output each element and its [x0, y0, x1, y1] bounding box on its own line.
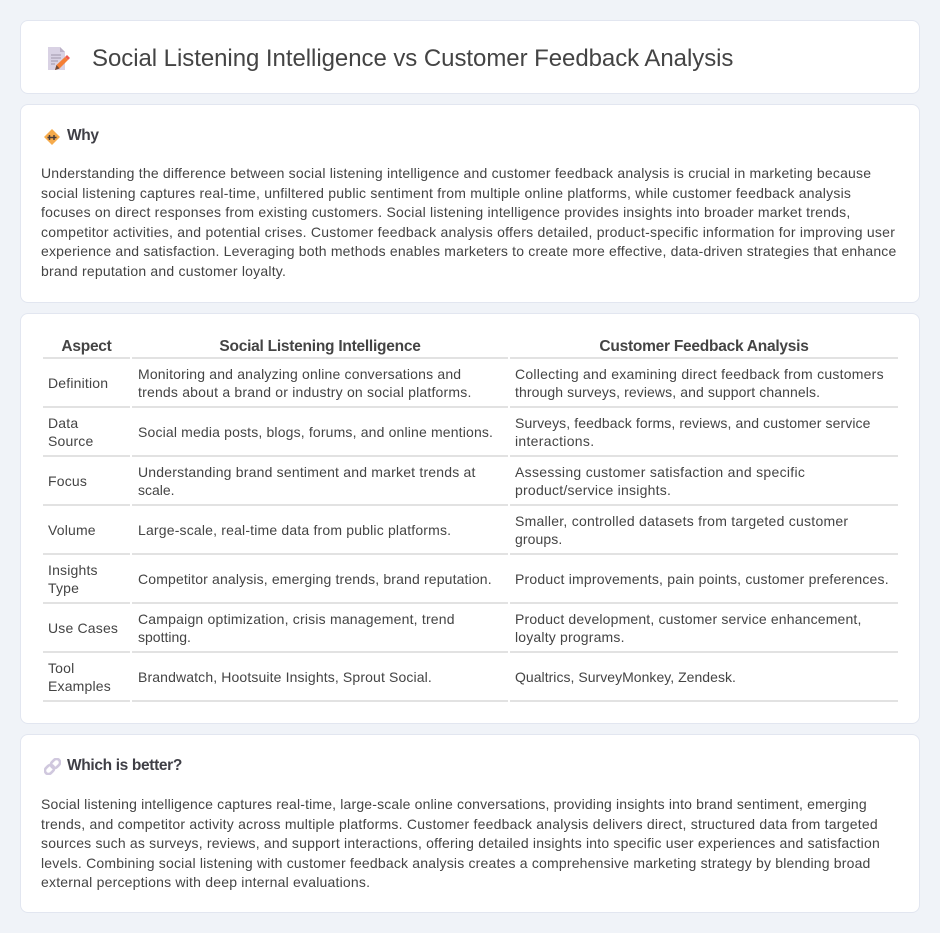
row: tool examples: Qualtrics, SurveyMonkey, Zendesk. [515, 669, 736, 685]
row: insights type: Competitor analysis, emerging trends, brand reputation. [138, 571, 492, 587]
table header row: Customer Feedback Analysis [599, 338, 809, 355]
icon: chain link [44, 758, 61, 775]
row: insights type: Insights [48, 562, 98, 578]
row: data source: Source [48, 433, 93, 449]
row: data source: Social media posts, blogs, forums, and online mentions. [138, 424, 493, 440]
row: use cases: Product development, customer service enhancement, [515, 611, 862, 627]
text: which is better paragraph [41, 796, 880, 890]
table header row: Social Listening Intelligence [219, 338, 421, 355]
row: data source: interactions. [515, 433, 594, 449]
row: use cases [43, 611, 898, 653]
title: Social Listening Intelligence vs Customer Feedback Analysis [92, 45, 733, 72]
text: which is better paragraph: sources such as surveys, reviews, and support interactions, offering detailed insights into specific user experiences and satisfaction [41, 835, 880, 851]
row: definition [43, 366, 898, 408]
text: why paragraph: brand reputation and customer loyalty. [41, 263, 286, 279]
text: why paragraph: competitor activities, and potential crises. Customer feedback analysis offers detailed, product-specific information for improving user [41, 224, 895, 240]
row: definition: Collecting and examining direct feedback from customers [515, 366, 884, 382]
row: insights type: Type [48, 580, 79, 596]
row: volume: Volume [48, 522, 96, 538]
text: which is better paragraph: Social listening intelligence captures real-time, large-scale online conversations, providing insights into brand sentiment, emerging [41, 796, 867, 812]
row: focus: scale. [138, 482, 175, 498]
row: focus [43, 464, 898, 506]
row: use cases: Use Cases [48, 620, 118, 636]
row: data source [43, 415, 898, 457]
row: focus: Focus [48, 473, 87, 489]
row: definition: trends about a brand or industry on social platforms. [138, 384, 472, 400]
table header row [43, 338, 898, 359]
row: focus: Assessing customer satisfaction and specific [515, 464, 805, 480]
row: definition: Definition [48, 375, 108, 391]
row: data source: Data [48, 415, 78, 431]
row: insights type [43, 562, 898, 604]
panel: which is better [20, 734, 920, 913]
row: volume: Smaller, controlled datasets from targeted customer [515, 513, 848, 529]
icon: document with pencil [48, 47, 70, 70]
heading: which is better: Which is better? [67, 757, 182, 774]
row: use cases: Campaign optimization, crisis management, trend [138, 611, 455, 627]
heading: why: Why [67, 127, 99, 144]
text: why paragraph: experience and satisfaction. Leveraging both methods enables marketers to create more effective, data-driven strategies that enhance [41, 243, 896, 259]
panel: why [20, 104, 920, 303]
row: tool examples [43, 660, 898, 702]
table header row: Aspect [61, 338, 112, 355]
row: volume [43, 513, 898, 555]
text: why paragraph: social listening captures real-time, unfiltered public sentiment from multiple online platforms, while customer feedback analysis [41, 185, 851, 201]
row: use cases: loyalty programs. [515, 629, 625, 645]
icon: diamond sign [44, 129, 60, 145]
text: why paragraph: Understanding the difference between social listening intelligence and customer feedback analysis is crucial in marketing because [41, 165, 871, 181]
header panel [20, 20, 920, 94]
row: tool examples: Brandwatch, Hootsuite Insights, Sprout Social. [138, 669, 432, 685]
row: use cases: spotting. [138, 629, 191, 645]
panel: comparison table [20, 313, 920, 724]
comparison table [43, 338, 898, 702]
row: focus: product/service insights. [515, 482, 671, 498]
row: tool examples: Tool [48, 660, 74, 676]
text: which is better paragraph: external perceptions with deep internal evaluations. [41, 874, 370, 890]
row: tool examples: Examples [48, 678, 111, 694]
row: volume: groups. [515, 531, 562, 547]
row: insights type: Product improvements, pain points, customer preferences. [515, 571, 889, 587]
row: focus: Understanding brand sentiment and market trends at [138, 464, 476, 480]
text: why paragraph: focuses on direct responses from existing customers. Social listening intelligence provides insights into broader market trends, [41, 204, 850, 220]
row: volume: Large-scale, real-time data from public platforms. [138, 522, 451, 538]
row: data source: Surveys, feedback forms, reviews, and customer service [515, 415, 871, 431]
text: which is better paragraph: levels. Combining social listening with customer feedback analysis creates a comprehensive marketing strategy by blending broad [41, 855, 871, 871]
text: why paragraph [41, 165, 896, 279]
row: definition: Monitoring and analyzing online conversations and [138, 366, 461, 382]
text: which is better paragraph: trends, and competitor activity across multiple platforms. Customer feedback analysis delivers direct, structured data from targeted [41, 816, 878, 832]
row: definition: through surveys, reviews, and support channels. [515, 384, 820, 400]
